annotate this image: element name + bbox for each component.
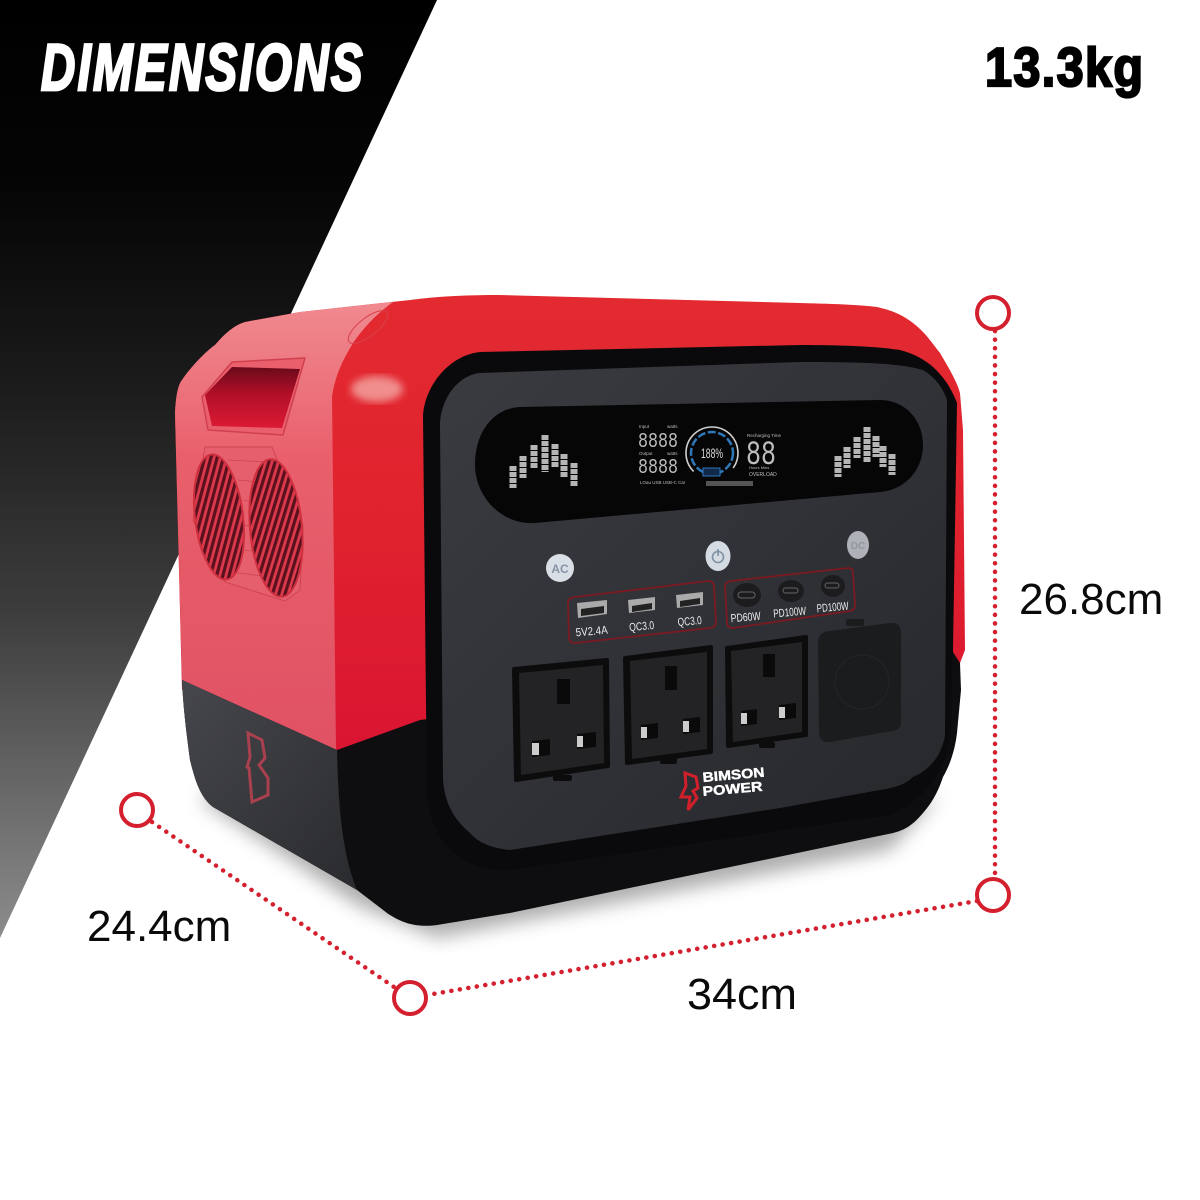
USB-C port group: PD60W — [730, 611, 761, 625]
LCD display: OVERLOAD — [749, 472, 777, 478]
AC button — [546, 554, 574, 582]
USB port group: QC3.0 — [677, 615, 702, 629]
LCD display: 88 — [746, 437, 776, 475]
USB-C port group: PD100W — [816, 601, 849, 615]
top highlight — [351, 376, 403, 402]
base side face — [182, 680, 357, 890]
LCD display: Input — [639, 424, 650, 429]
UK socket 2 — [625, 647, 711, 764]
LCD display: 8888 — [638, 431, 678, 454]
side vents — [188, 447, 308, 601]
brand logo: POWER — [702, 779, 763, 799]
LCD display: Output — [639, 451, 653, 456]
height dimension line — [977, 297, 1009, 911]
LCD display: watts — [667, 451, 678, 456]
USB port group: QC3.0 — [629, 620, 655, 634]
UK socket 1 — [514, 660, 608, 781]
UK socket 3 — [727, 637, 806, 748]
height label: 26.8cm — [1019, 575, 1163, 624]
depth label: 24.4cm — [87, 902, 231, 951]
brand logo — [681, 765, 765, 810]
LCD display: 188% — [701, 445, 723, 461]
black to grey diagonal background — [0, 0, 437, 938]
LCD display: Recharging Time — [747, 433, 782, 438]
front panel — [440, 362, 947, 850]
power button — [706, 541, 730, 571]
left LED arrow — [513, 435, 574, 488]
right LED arrow — [838, 427, 892, 477]
DC button: DC — [851, 541, 865, 552]
USB-C port group: PD100W — [773, 606, 807, 620]
LCD display: watts — [667, 424, 678, 429]
front bezel — [423, 345, 957, 870]
weight: 13.3kg — [985, 37, 1144, 99]
USB port group — [568, 581, 716, 643]
side face — [175, 302, 393, 750]
ground shadow — [200, 790, 940, 938]
title: DIMENSIONS — [41, 31, 365, 105]
USB-C port group — [725, 568, 855, 628]
LCD display: 8888 — [638, 457, 678, 480]
AC button: AC — [551, 562, 569, 576]
width dimension line — [427, 901, 977, 995]
red shell silhouette — [175, 295, 965, 760]
rubber port cover — [818, 619, 901, 742]
width label: 34cm — [687, 970, 797, 1019]
black base — [182, 652, 961, 926]
USB port group: 5V2.4A — [575, 625, 608, 639]
brand logo: BIMSON — [702, 765, 765, 785]
DC button — [847, 531, 869, 559]
side logo — [247, 733, 268, 802]
product: portable power station — [175, 295, 965, 938]
top seam oval — [344, 305, 392, 349]
LCD display — [638, 416, 782, 490]
depth dimension line — [121, 794, 426, 1014]
LCD display: LOau USB USB-C Car — [640, 480, 686, 485]
LCD strip — [475, 400, 923, 523]
LCD display: Hours Mins — [749, 465, 769, 470]
carry handle — [202, 358, 305, 435]
